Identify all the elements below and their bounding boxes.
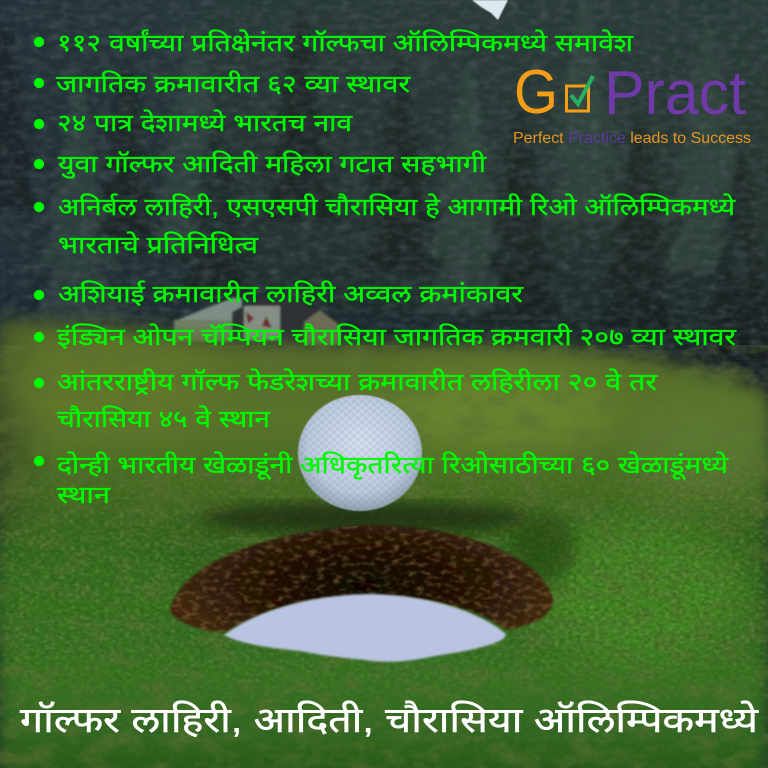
background photo: grass — [0, 322, 768, 768]
grass texture — [0, 474, 768, 701]
bullet 2: जागतिक क्रमावारीत ६२ व्या स्थावर — [56, 70, 411, 98]
bullet 5: भारताचे प्रतिनिधित्व — [58, 231, 259, 259]
ball reflection in hole — [224, 594, 506, 662]
logo: GoPract — [513, 58, 751, 147]
golf hole — [165, 520, 560, 662]
bullet 3: २४ पात्र देशामध्ये भारतच नाव — [57, 109, 353, 137]
bullet 1: ११२ वर्षांच्या प्रतिक्षेनंतर गॉल्फचा ऑलिम्पिकमध्ये समावेश — [57, 29, 634, 57]
bullet 9: स्थान — [57, 482, 111, 509]
bullet 9: दोन्ही भारतीय खेळाडूंनी अधिकृतरित्या रिओसाठीच्या ६० खेळाडूंमध्ये — [57, 451, 729, 480]
sky gap — [472, 0, 508, 20]
bullet 9 — [34, 451, 729, 509]
golf ball — [296, 394, 424, 512]
bullet 4: युवा गॉल्फर आदिती महिला गटात सहभागी — [58, 150, 487, 179]
logo tagline: Perfect Practice leads to Success — [513, 130, 751, 147]
icon: checkbox — [566, 76, 593, 111]
grass mottling — [0, 345, 768, 768]
background photo: house — [172, 296, 340, 345]
bullet 7: इंड्यिन ओपन चॅम्पियन चौरासिया जागतिक क्रमवारी २०७ व्या स्थावर — [57, 323, 737, 351]
bullet 6: अशियाई क्रमावारीत लाहिरी अव्वल क्रमांकावर — [58, 280, 524, 308]
ball shadow on grass — [200, 502, 530, 534]
bullet list — [34, 29, 737, 509]
background photo: forest — [0, 0, 768, 400]
conifer trees — [0, 0, 768, 360]
bullet 8: चौरासिया ४५ वे स्थान — [57, 405, 271, 433]
ball dimples — [296, 394, 424, 512]
bullet 5: अनिर्बल लाहिरी, एसएसपी चौरासिया हे आगामी रिओ ऑलिम्पिकमध्ये — [58, 193, 736, 221]
forest texture — [0, 0, 768, 400]
bullet 5 — [34, 193, 736, 259]
soil texture — [170, 526, 552, 632]
grass tones — [0, 325, 768, 660]
bullet 8 — [34, 368, 658, 433]
bullet 8: आंतरराष्ट्रीय गॉल्फ फेडरेशच्या क्रमावारीत लहिरीला २० वे तर — [57, 368, 658, 396]
logo word Pract: Pract — [604, 59, 746, 128]
logo letter G: G — [514, 58, 558, 127]
title: गॉल्फर लाहिरी, आदिती, चौरासिया ऑलिम्पिकमध्ये — [20, 700, 759, 740]
